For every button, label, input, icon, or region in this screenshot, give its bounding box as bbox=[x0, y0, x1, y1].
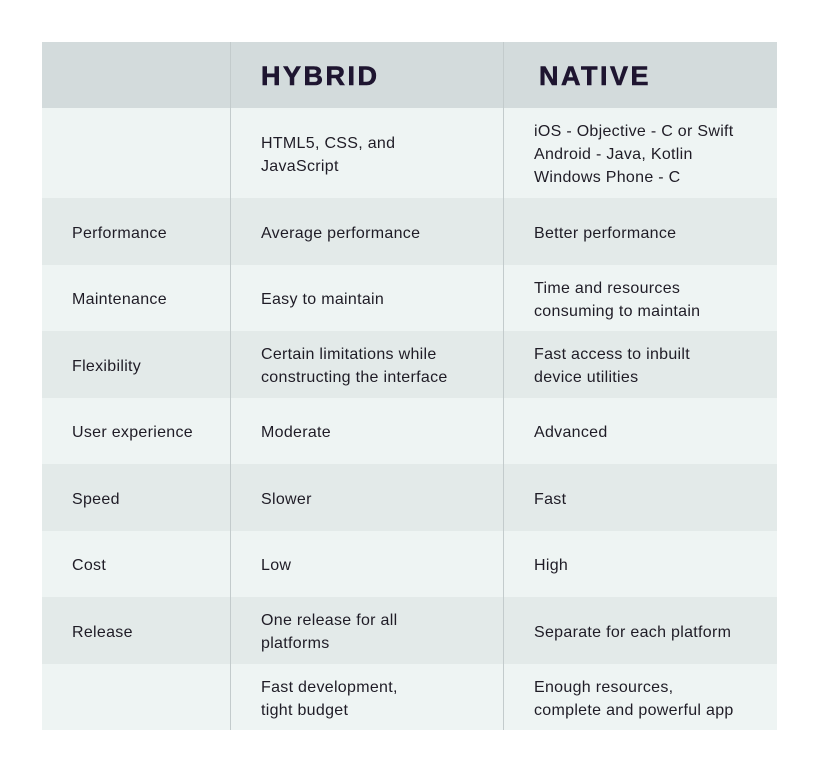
row: performance: Performance bbox=[72, 224, 167, 242]
row: performance bbox=[42, 198, 777, 265]
header row bbox=[42, 42, 777, 108]
row: maintenance: Time and resources bbox=[534, 280, 680, 296]
row: user experience: User experience bbox=[72, 424, 193, 441]
row: languages: Android - Java, Kotlin bbox=[534, 146, 693, 163]
row: performance: Average performance bbox=[261, 224, 420, 242]
row: release: Release bbox=[72, 624, 133, 640]
row: flexibility: Fast access to inbuilt bbox=[534, 346, 690, 363]
row: maintenance: Easy to maintain bbox=[261, 291, 384, 308]
row: flexibility bbox=[42, 331, 777, 398]
row: flexibility: constructing the interface bbox=[261, 369, 448, 386]
row: cost: Low bbox=[261, 557, 291, 574]
row: use case: complete and powerful app bbox=[534, 702, 734, 718]
table bbox=[42, 42, 777, 730]
row: flexibility: Certain limitations while bbox=[261, 346, 437, 363]
row: speed: Fast bbox=[534, 490, 566, 508]
row: release: Separate for each platform bbox=[534, 624, 731, 640]
row: languages: HTML5, CSS, and bbox=[261, 134, 395, 152]
row: maintenance: Maintenance bbox=[72, 291, 167, 308]
row: speed: Slower bbox=[261, 490, 312, 508]
row: user experience: Advanced bbox=[534, 424, 608, 441]
row: cost bbox=[42, 531, 777, 597]
row: cost: High bbox=[534, 557, 568, 574]
row: user experience bbox=[42, 398, 777, 464]
row: languages: Windows Phone - C bbox=[534, 169, 680, 186]
row: release: One release for all bbox=[261, 612, 397, 629]
row: maintenance: consuming to maintain bbox=[534, 302, 700, 320]
heading: hybrid: HYBRID bbox=[261, 61, 380, 91]
row: use case: tight budget bbox=[261, 702, 348, 718]
row: release bbox=[42, 597, 777, 664]
row: speed: Speed bbox=[72, 490, 120, 508]
row: release: platforms bbox=[261, 635, 330, 652]
row: flexibility: device utilities bbox=[534, 369, 638, 386]
row: user experience: Moderate bbox=[261, 424, 331, 441]
row: languages: iOS - Objective - C or Swift bbox=[534, 123, 734, 140]
row: performance: Better performance bbox=[534, 224, 676, 242]
row: languages bbox=[42, 108, 777, 198]
row: use case: Fast development, bbox=[261, 678, 398, 696]
row: use case: Enough resources, bbox=[534, 678, 673, 696]
row: cost: Cost bbox=[72, 557, 106, 574]
row: speed bbox=[42, 464, 777, 531]
row: flexibility: Flexibility bbox=[72, 358, 141, 374]
row: use case bbox=[42, 664, 777, 730]
row: languages: JavaScript bbox=[261, 158, 339, 174]
heading: native: NATIVE bbox=[539, 61, 651, 91]
row: maintenance bbox=[42, 265, 777, 331]
